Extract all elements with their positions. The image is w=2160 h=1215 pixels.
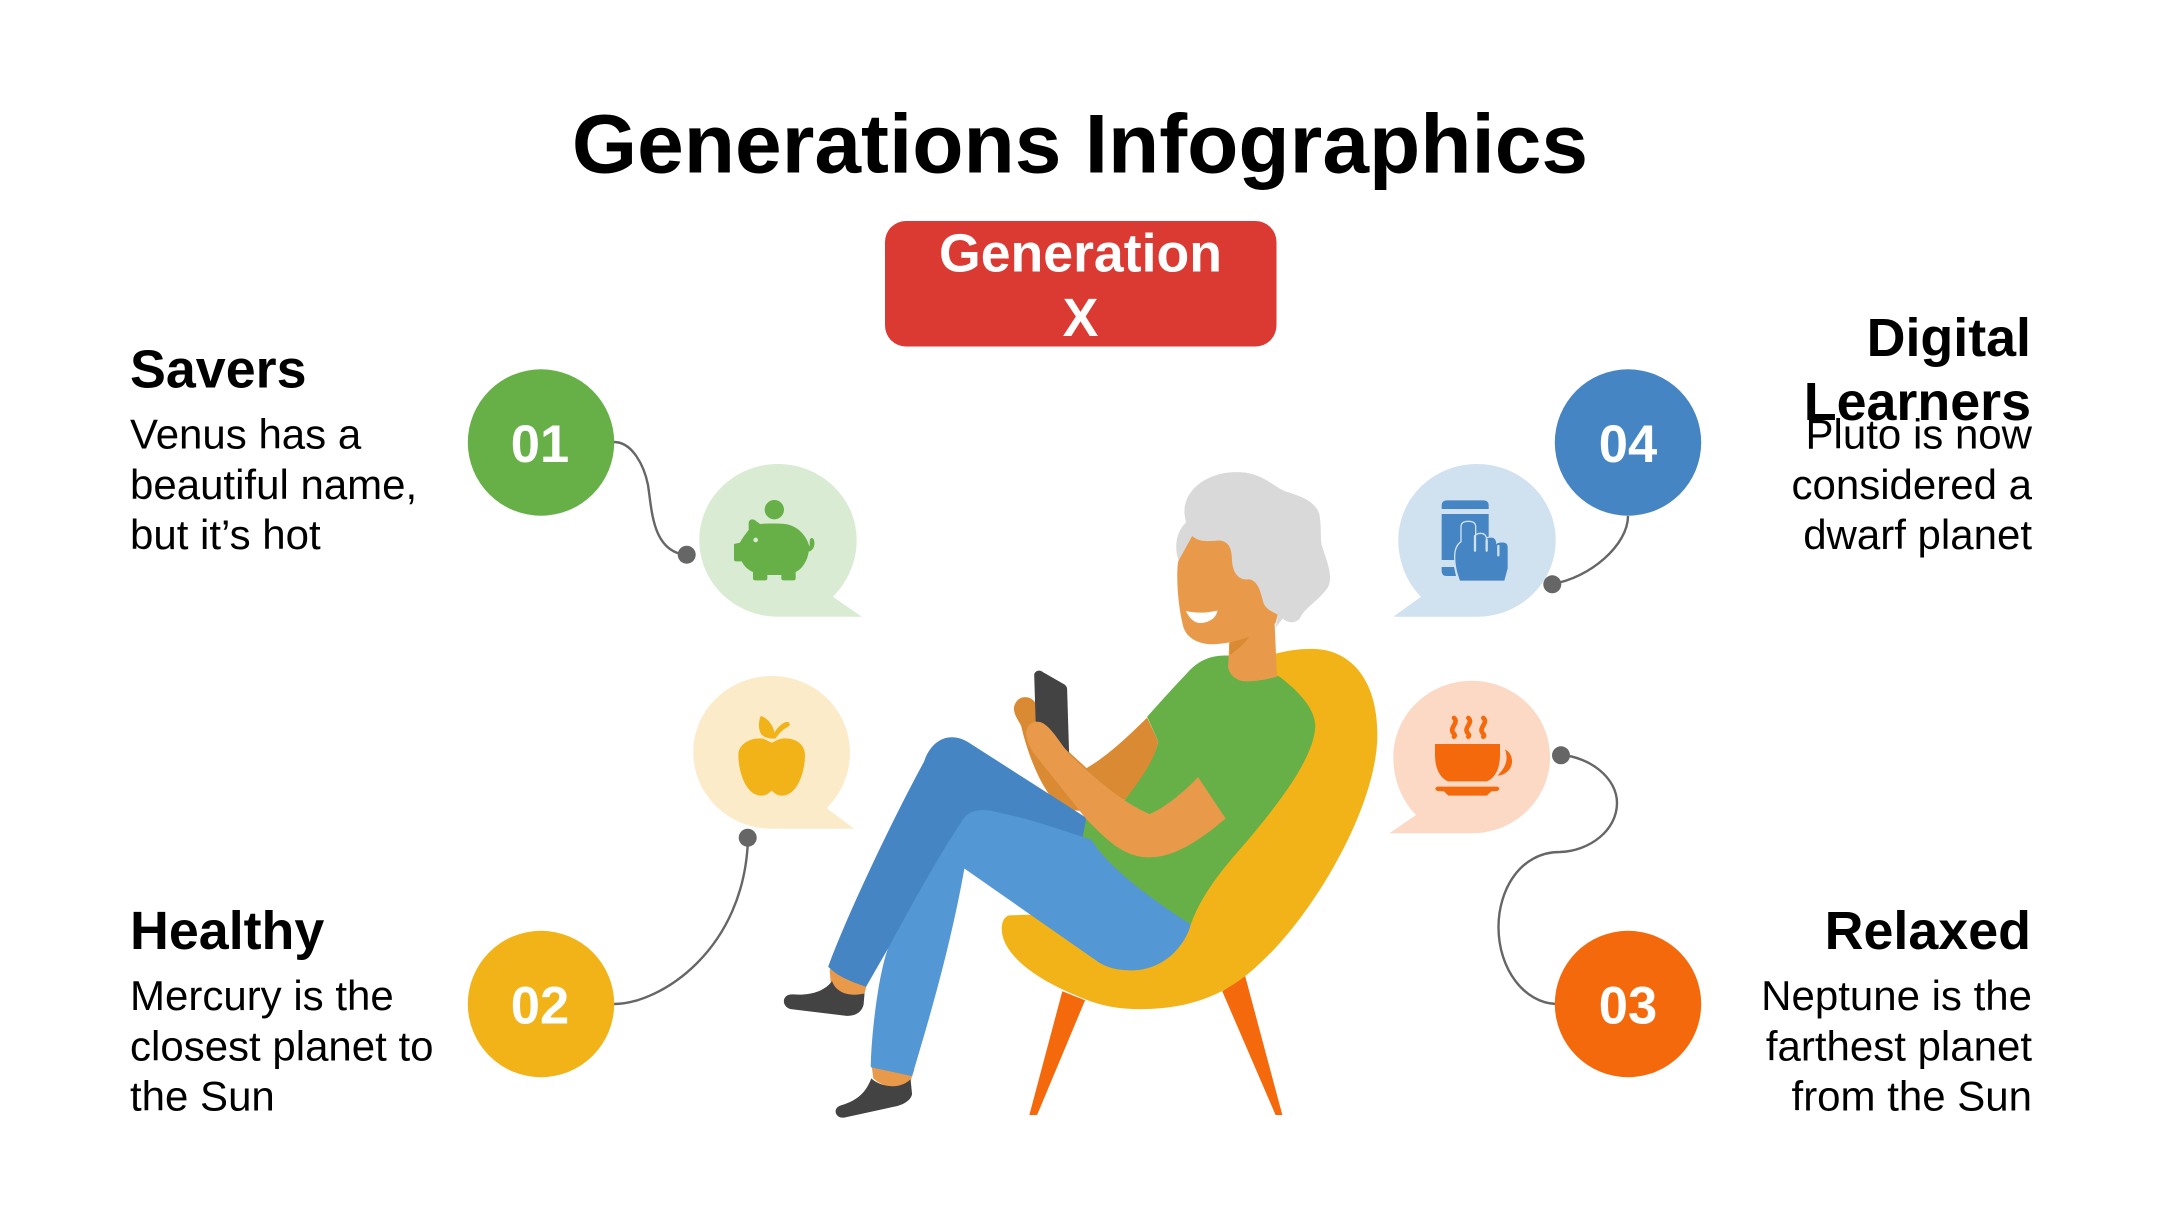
icon: piggy bank: [734, 500, 814, 580]
icon: hand on phone: [1442, 500, 1508, 581]
connector 03: [1498, 746, 1617, 1004]
text: relaxed description: from the Sun: [1792, 1072, 2032, 1120]
icon: coffee cup: [1435, 718, 1512, 796]
connector 02: [614, 829, 757, 1004]
speech bubble: healthy: [693, 676, 854, 829]
chair seat and back: [1002, 649, 1377, 1009]
text: healthy description: closest planet to: [130, 1022, 434, 1069]
panel: healthy: [130, 676, 854, 1120]
number 01: [468, 369, 614, 516]
back foot: [784, 969, 868, 1016]
front arm: [1026, 722, 1226, 857]
connector 01: [614, 442, 696, 564]
neck shadow: [1230, 634, 1250, 655]
badge: Generation X: X: [1063, 288, 1099, 348]
front leg: [871, 810, 1191, 1076]
face: [1177, 534, 1280, 644]
badge: Generation X: Generation: [939, 224, 1222, 284]
heading: digital learners: Learners: [1804, 372, 2031, 432]
text: healthy description: the Sun: [130, 1072, 275, 1120]
front foot: [836, 1063, 914, 1118]
text: relaxed description: farthest planet: [1766, 1022, 2032, 1069]
number 01: 01: [511, 415, 569, 474]
chair legs: [1029, 976, 1282, 1115]
text: digital learners description: dwarf planet: [1803, 511, 2032, 558]
number 02: 02: [511, 976, 569, 1036]
text: savers description: Venus has a: [130, 410, 362, 458]
text: savers description: beautiful name,: [130, 461, 417, 508]
neck: [1228, 623, 1277, 681]
speech bubble: digital learners: [1393, 464, 1556, 617]
text: relaxed description: Neptune is the: [1761, 972, 2032, 1019]
number 03: 03: [1599, 976, 1657, 1036]
heading: savers: Savers: [130, 340, 306, 400]
mouth: [1186, 611, 1217, 623]
panel: savers: [130, 340, 862, 617]
shirt: [1082, 655, 1315, 924]
speech bubble: savers: [699, 464, 862, 617]
illustration: person sitting in chair with phone: [784, 472, 1377, 1118]
panel: relaxed: [1389, 681, 2032, 1120]
heading: relaxed: Relaxed: [1825, 901, 2031, 961]
number 04: [1555, 369, 1701, 516]
text: digital learners description: Pluto is now: [1806, 410, 2033, 458]
back hand: [1014, 697, 1158, 811]
heading: digital learners: Digital: [1867, 308, 2031, 368]
number 02: [468, 931, 614, 1077]
text: digital learners description: considered a: [1792, 461, 2033, 508]
back leg: [828, 737, 1096, 987]
icon: apple: [738, 716, 805, 796]
speech bubble: relaxed: [1389, 681, 1550, 833]
hair: [1176, 472, 1330, 627]
connector 04: [1543, 516, 1628, 593]
panel: digital learners: [1393, 308, 2033, 617]
text: healthy description: Mercury is the: [130, 972, 394, 1019]
heading: healthy: Healthy: [130, 901, 324, 961]
text: savers description: but it’s hot: [130, 511, 321, 558]
phone: [1034, 671, 1069, 752]
number 04: 04: [1599, 415, 1657, 474]
number 03: [1555, 931, 1701, 1077]
title: Generations Infographics: [572, 96, 1588, 190]
badge: Generation X: [885, 221, 1276, 348]
